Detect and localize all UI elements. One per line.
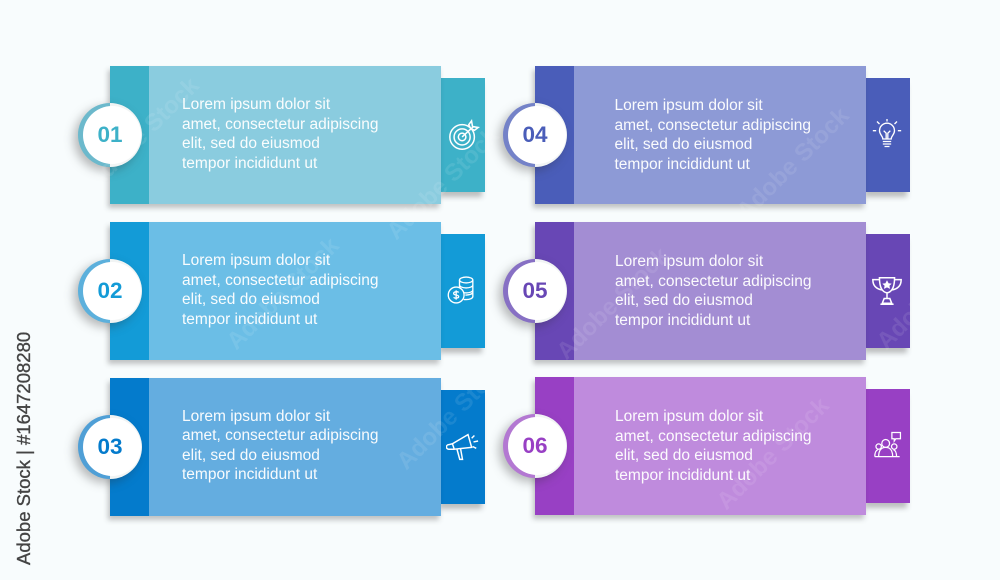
number disc 6	[494, 413, 568, 487]
text 5	[615, 253, 811, 328]
row 1: target	[69, 66, 485, 211]
row 2: coins	[69, 222, 485, 367]
text 4	[614, 97, 811, 172]
text 4: tempor incididunt ut	[614, 156, 750, 172]
text 4: elit, sed do eiusmod	[614, 136, 752, 153]
text 3	[182, 408, 378, 483]
watermark text: Adobe Stock	[872, 232, 994, 355]
number 05: 05	[522, 278, 548, 303]
row 3: megaphone	[69, 378, 485, 523]
watermark text: Adobe Stock	[222, 232, 344, 355]
icon tab 2	[441, 234, 485, 348]
number 04: 04	[522, 122, 548, 147]
text 1: Lorem ipsum dolor sit	[182, 96, 330, 113]
card 2	[110, 222, 441, 360]
text 6	[615, 408, 811, 484]
text 3: amet, consectetur adipiscing	[182, 427, 378, 444]
icon tab 5	[866, 234, 910, 348]
number disc 5	[494, 258, 567, 332]
text 2: amet, consectetur adipiscing	[182, 272, 378, 288]
number 03: 03	[97, 434, 123, 458]
text 3: Lorem ipsum dolor sit	[182, 408, 330, 424]
text 5: Lorem ipsum dolor sit	[615, 253, 763, 270]
text 1: tempor incididunt ut	[182, 154, 317, 172]
icon: trophy	[872, 277, 902, 305]
number 02: 02	[97, 278, 123, 303]
text 1	[182, 96, 378, 172]
row 5: trophy	[494, 222, 910, 367]
text 4: amet, consectetur adipiscing	[614, 116, 811, 134]
card 1	[110, 66, 441, 204]
text 3: tempor incididunt ut	[182, 466, 317, 483]
icon: light bulb	[872, 119, 902, 148]
icon tab 6	[866, 389, 910, 503]
number 06: 06	[522, 433, 548, 458]
watermark text: Adobe Stock	[732, 102, 854, 225]
text 3: elit, sed do eiusmod	[182, 446, 320, 464]
card 4	[535, 66, 866, 204]
watermark text: Adobe Stock	[712, 392, 834, 515]
number disc 2	[69, 258, 143, 332]
text 5: elit, sed do eiusmod	[615, 292, 753, 309]
text 2	[182, 252, 378, 328]
watermark text: Adobe Stock	[82, 72, 204, 195]
side credit text: Adobe Stock | #1647208280	[13, 332, 34, 565]
row 4: bulb	[494, 66, 910, 211]
number disc 3	[69, 414, 142, 488]
card 3	[110, 378, 441, 516]
text 1: elit, sed do eiusmod	[182, 135, 320, 152]
watermark text: Adobe Stock	[392, 352, 514, 475]
icon: team with speech bubble	[874, 432, 902, 458]
text 6: Lorem ipsum dolor sit	[615, 408, 763, 425]
text 5: tempor incididunt ut	[615, 312, 750, 328]
number 01: 01	[97, 122, 123, 147]
icon tab 1	[441, 78, 485, 192]
icon tab 4	[866, 78, 910, 192]
text 1: amet, consectetur adipiscing	[182, 116, 378, 132]
number disc 1	[69, 102, 142, 176]
number disc 4	[494, 102, 568, 176]
icon: target	[449, 119, 480, 150]
text 6: amet, consectetur adipiscing	[615, 428, 811, 444]
row 6: team	[494, 377, 910, 522]
text 2: tempor incididunt ut	[182, 310, 317, 328]
watermark text: Adobe Stock	[382, 122, 504, 245]
card 6	[535, 377, 866, 515]
text 6: elit, sed do eiusmod	[615, 447, 753, 464]
icon: coins	[448, 276, 474, 304]
text 2: Lorem ipsum dolor sit	[182, 252, 330, 269]
text 2: elit, sed do eiusmod	[182, 291, 320, 308]
icon tab 3	[441, 390, 485, 504]
text 5: amet, consectetur adipiscing	[615, 272, 811, 290]
text 4: Lorem ipsum dolor sit	[614, 97, 763, 114]
icon: megaphone	[446, 434, 478, 460]
watermark text: Adobe Stock	[552, 242, 674, 365]
card 5	[535, 222, 866, 360]
text 6: tempor incididunt ut	[615, 466, 750, 484]
